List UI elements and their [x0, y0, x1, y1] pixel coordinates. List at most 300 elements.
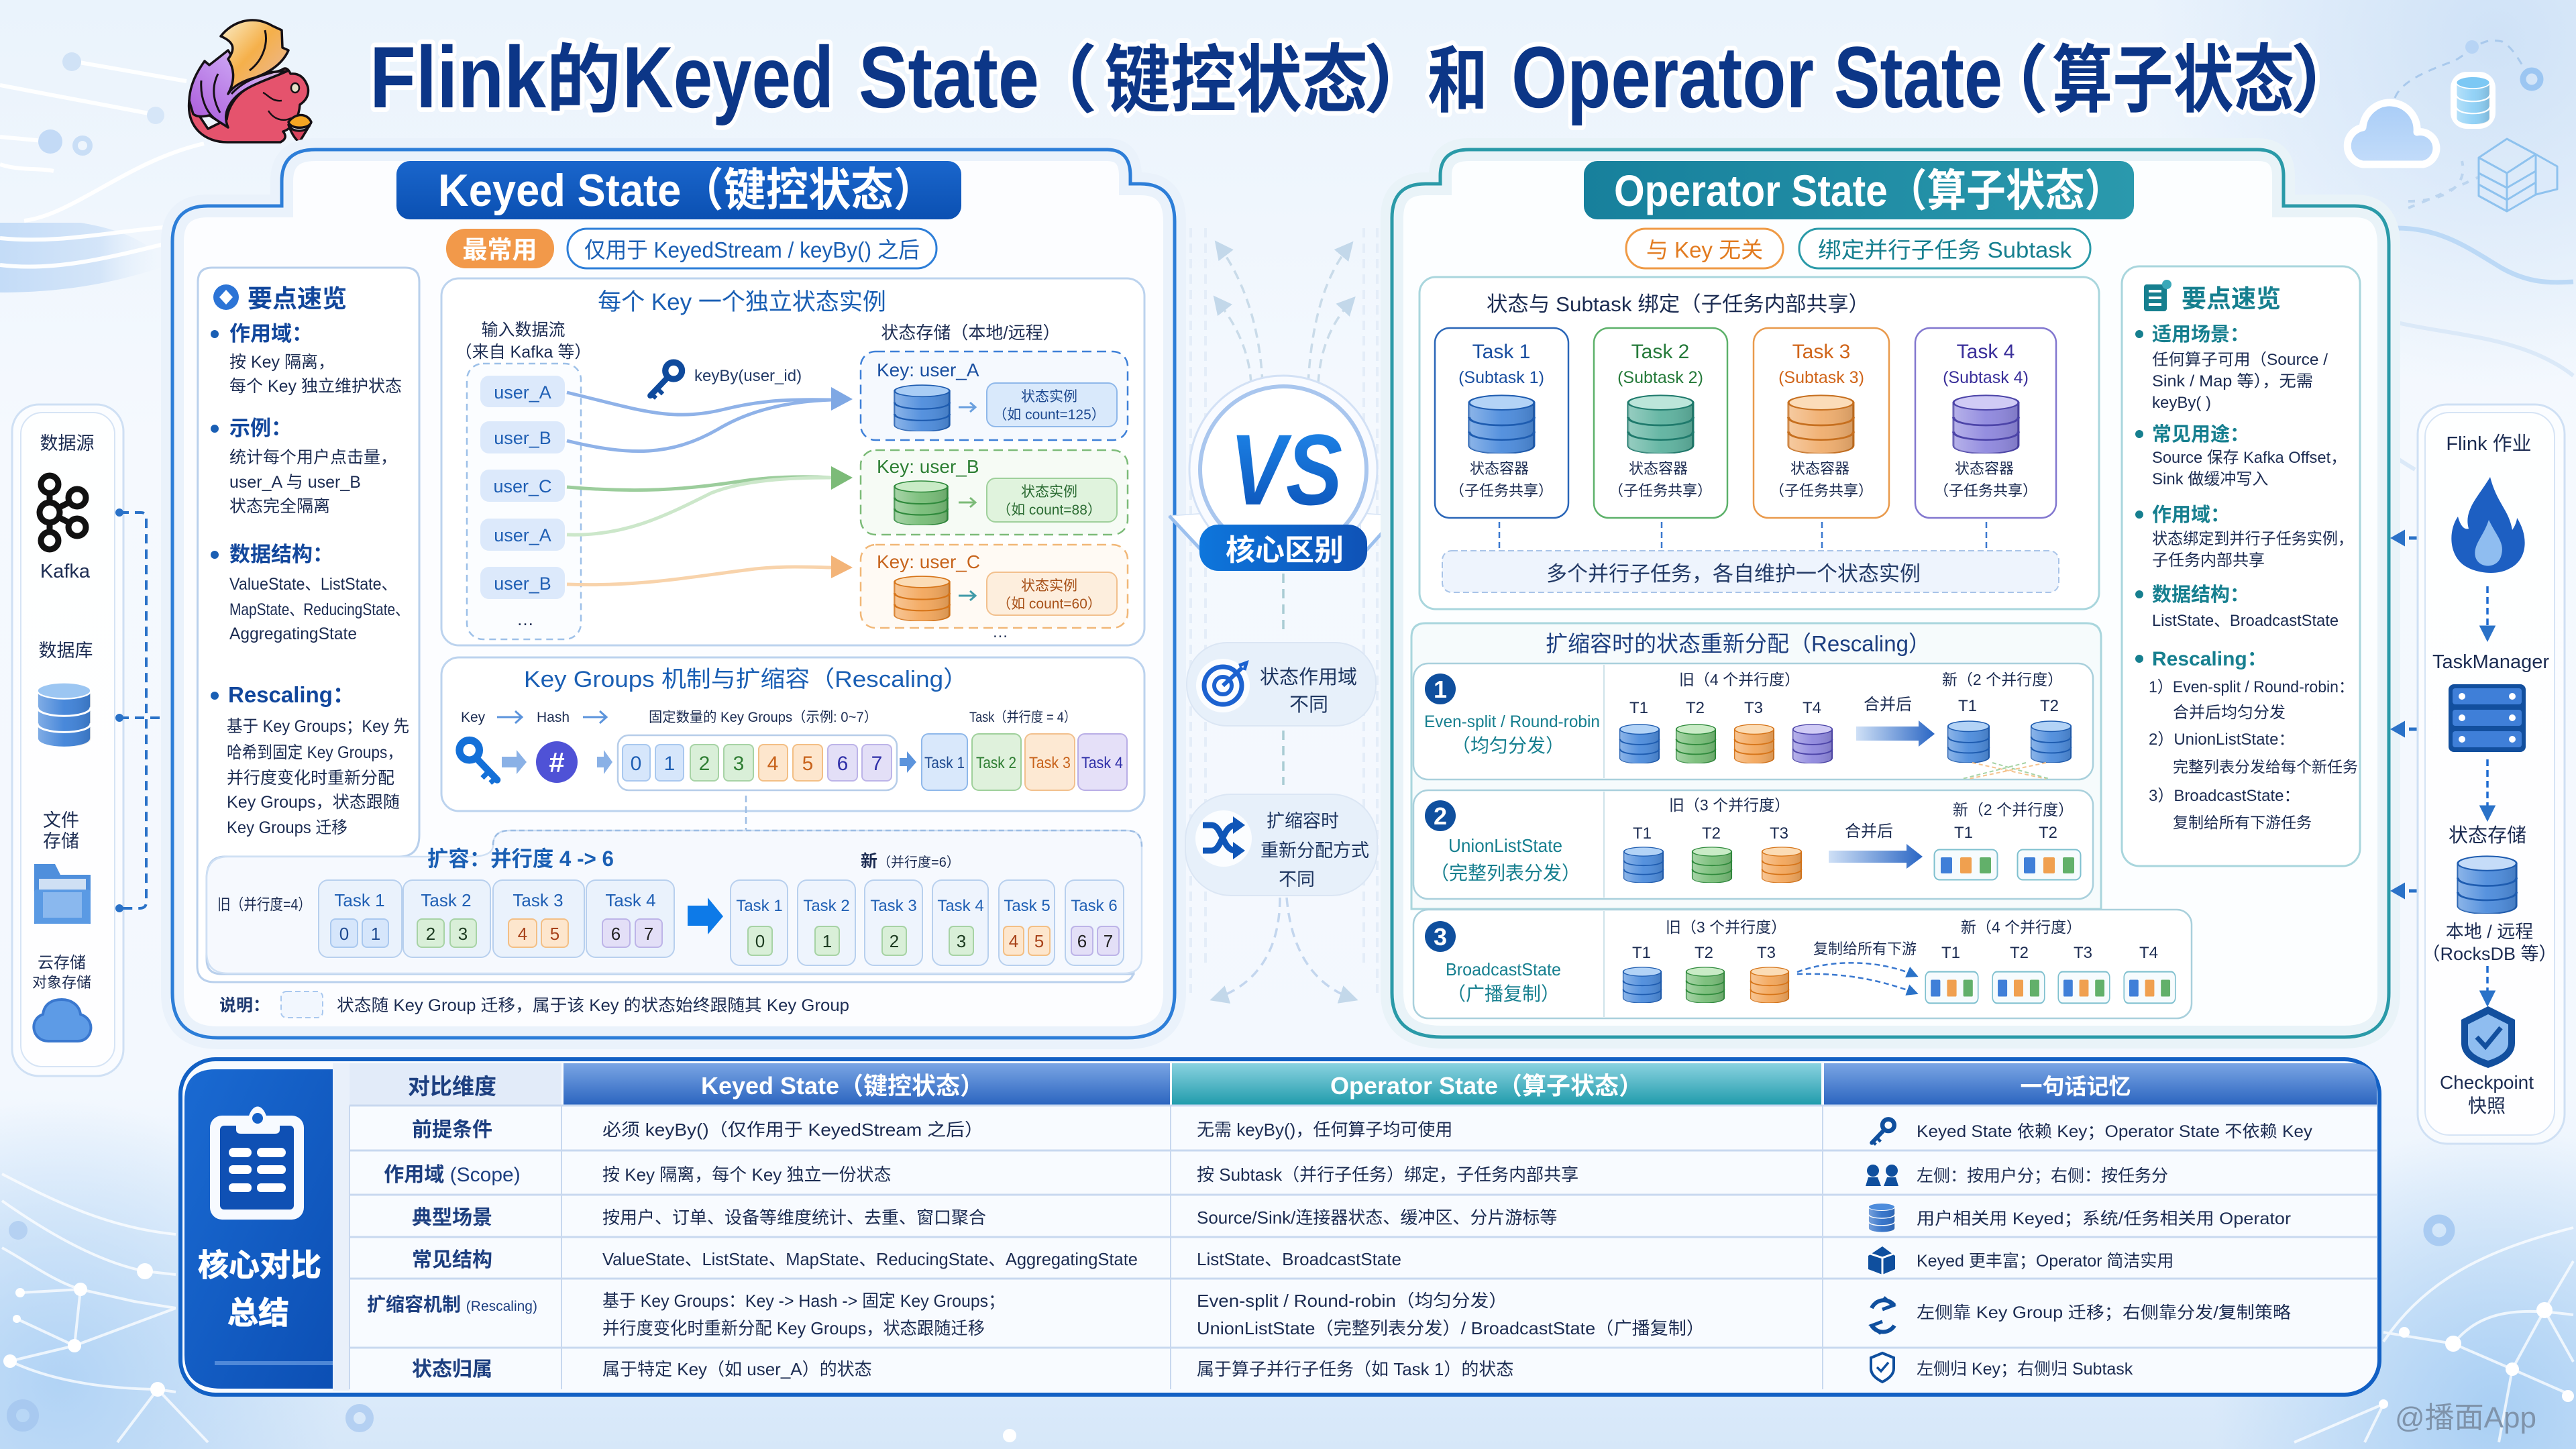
title: （ [1024, 40, 1097, 122]
text: TaskManager: TaskManager [2432, 651, 2549, 673]
row: broadcast state: T4 [2139, 944, 2158, 962]
group: new tasks: 4 [1009, 931, 1018, 951]
title: Flink [370, 28, 547, 126]
group: four tasks [922, 734, 1127, 790]
decoration: dashed curves around VS [1191, 228, 1377, 999]
group: old tasks: Task 1 [334, 890, 385, 910]
group: old tasks: Task 2 [421, 890, 472, 910]
text: common uses [2135, 423, 2347, 488]
legend: 状态随 Key Group 迁移，属于该 Key 的状态始终跟随其 Key Group [337, 996, 849, 1015]
text: data structures: AggregatingState [229, 625, 357, 643]
icon: state store [2458, 856, 2516, 914]
state: user A [861, 352, 1128, 440]
text: common uses: Sink 做缓冲写入 [2152, 470, 2268, 488]
row: broadcast state: T1 [1941, 944, 1960, 962]
row: broadcast state: 复制给所有下游 [1813, 941, 1917, 957]
group: input keys: user_B [494, 574, 551, 594]
icon: hash: # [549, 747, 565, 778]
row labels: 作用域 (Scope) [384, 1164, 521, 1186]
row: union list state: （完整列表分发） [1430, 863, 1580, 883]
block: summary label [184, 1069, 333, 1389]
group: four tasks: Task 3 [1029, 754, 1071, 772]
text: rescaling: Rescaling： [228, 682, 355, 707]
row: broadcast state: T3 [2074, 944, 2092, 962]
group: new tasks: 1 [822, 931, 832, 951]
callout: scope differs: 不同 [1289, 694, 1328, 716]
text: applicable scenarios: 适用场景： [2152, 323, 2249, 345]
icon: doc [2144, 280, 2171, 311]
group: new tasks: 5 [1034, 931, 1044, 951]
group: input keys: … [517, 609, 534, 629]
arrow: flame to TaskManager [2486, 586, 2489, 637]
group: four tasks: Task 2 [976, 754, 1016, 772]
state: user C: 状态实例 [1021, 578, 1077, 594]
badge: KeyedStream only [568, 229, 936, 268]
column: Keyed State values: 基于 Key Groups：Key -> Hash -> 固定 Key Groups； [602, 1291, 1005, 1311]
card: task 3: （子任务共享） [1770, 482, 1873, 499]
text: example: 状态完全隔离 [229, 497, 330, 516]
group: input keys: user_C [493, 476, 552, 496]
note: each subtask keeps state: 多个并行子任务，各自维护一个状态实例 [1546, 562, 1921, 586]
arrows: green flows [567, 466, 853, 535]
card: task 4: （子任务共享） [1934, 482, 2037, 499]
group: new tasks: Task 6 [1071, 897, 1118, 915]
panel: key points right [2122, 266, 2360, 866]
column: Keyed State values: 属于特定 Key（如 user_A）的状态 [602, 1359, 872, 1379]
text: applicable scenarios: 任何算子可用（Source / [2152, 351, 2328, 369]
text: example: user_A 与 user_B [229, 473, 361, 492]
row labels: 扩缩容机制 (Rescaling) [367, 1294, 537, 1315]
column: Keyed State values: 并行度变化时重新分配 Key Groups，状态跟随迁移 [602, 1318, 985, 1338]
text: data structures right: ListState、BroadcastState [2152, 612, 2339, 630]
group: new tasks: Task 4 [937, 897, 984, 915]
text: applicable scenarios: keyBy( ) [2152, 394, 2211, 412]
row: even split: T2 [1686, 699, 1705, 717]
arrows: job panel to operator panel [2395, 538, 2418, 891]
state: user A: （如 count=125） [993, 407, 1106, 423]
column: one-line memory values: Keyed State 依赖 Key；Operator State 不依赖 Key [1917, 1122, 2313, 1141]
group: key groups 0 to 7: 5 [802, 753, 813, 775]
heading: Keyed State: Keyed State（键控状态） [438, 165, 936, 216]
text: data structures right [2135, 584, 2339, 630]
title: 键控状态 [1105, 40, 1368, 122]
row: broadcast state: T2 [1695, 944, 1713, 962]
column: Operator State values: 属于算子并行子任务（如 Task 1）的状态 [1197, 1359, 1513, 1379]
card: task 4: 状态容器 [1955, 460, 2014, 477]
callout: redistribution differs: 不同 [1279, 869, 1315, 890]
row: even split: Even-split / Round-robin [1424, 712, 1600, 731]
text: rescaling right: 2）UnionListState： [2149, 731, 2294, 749]
title: 的 [546, 38, 621, 122]
text: data structures right: 数据结构： [2152, 584, 2249, 606]
state: user C: Key: user_C [877, 551, 980, 572]
text: hash flow labels: Hash [537, 710, 570, 725]
column: Operator State values [1197, 1120, 1705, 1379]
text: database: 数据库 [39, 641, 93, 661]
group: new tasks: Task 1 [736, 897, 783, 915]
group: key groups 0 to 7: 3 [733, 753, 744, 775]
title: Operator [1511, 28, 1814, 126]
panel: key groups [441, 657, 1144, 811]
title: 和 [1428, 40, 1488, 121]
group: old tasks: Task 4 [605, 890, 656, 910]
panel: Keyed State [172, 150, 1175, 1038]
group: key groups 0 to 7 [618, 735, 897, 790]
badge: key independent: 与 Key 无关 [1646, 237, 1763, 262]
badge: most used [446, 229, 554, 268]
text: rescaling right [2135, 648, 2358, 831]
row: broadcast state: 3 [1434, 923, 1447, 951]
VS badge [1169, 376, 1397, 571]
legend: 说明： [219, 996, 270, 1015]
title: Keyed [623, 28, 834, 126]
column: Keyed State values: 必须 keyBy()（仅作用于 KeyedStream 之后） [602, 1120, 983, 1140]
group: old tasks: 2 [426, 924, 435, 944]
text: input stream: 输入数据流 [481, 321, 566, 339]
badge: key independent [1626, 229, 1783, 268]
text: applicable scenarios [2135, 323, 2328, 412]
arrow: hash to groups [597, 750, 612, 774]
text: checkpoint: 快照 [2468, 1095, 2506, 1116]
badge: KeyedStream only: 仅用于 KeyedStream / keyBy() 之后 [584, 237, 920, 262]
decoration: cloud, database and cube top right [2347, 40, 2557, 211]
icon: database [38, 683, 91, 747]
table header [350, 1063, 2377, 1106]
arrows: orange flows [567, 555, 853, 585]
row labels: 典型场景 [412, 1207, 492, 1229]
group: old tasks: Task 3 [513, 890, 564, 910]
column: Operator State values: 无需 keyBy()，任何算子均可使用 [1197, 1120, 1452, 1140]
text: common uses: Source 保存 Kafka Offset， [2152, 449, 2347, 467]
badge: core difference [1199, 525, 1367, 571]
card: task 1: （子任务共享） [1450, 482, 1553, 499]
icon: cloud [34, 1000, 91, 1041]
icons: one-line memory [1866, 1119, 1898, 1382]
column: one-line memory values: 左侧：按用户分；右侧：按任务分 [1917, 1167, 2168, 1185]
arrow: groups to tasks [900, 751, 916, 773]
group: new tasks: 3 [957, 931, 966, 951]
group: key groups 0 to 7: 2 [699, 753, 710, 775]
text: data structures: MapState、ReducingState、 [229, 600, 409, 619]
row: even split: 合并后 [1864, 696, 1912, 714]
card: task 2: （子任务共享） [1609, 482, 1712, 499]
text: rescaling [211, 682, 409, 837]
row: union list state: T2 [2039, 824, 2057, 842]
text: input stream: （来自 Kafka 等） [455, 343, 591, 362]
group: old tasks [319, 880, 674, 957]
panel: key points [197, 268, 1134, 982]
arrow: data source connector [115, 508, 169, 912]
panel: Operator State [1392, 150, 2389, 1037]
column: Keyed State values: 按用户、订单、设备等维度统计、去重、窗口聚合 [602, 1208, 986, 1228]
row: even split: （均匀分发） [1452, 735, 1564, 756]
column: one-line memory values: Keyed 更丰富；Operator 简洁实用 [1917, 1252, 2174, 1271]
group: old tasks: 7 [644, 924, 653, 944]
heading: state bound: 状态与 Subtask 绑定（子任务内部共享） [1487, 292, 1870, 316]
icon: flame [2451, 477, 2525, 573]
heading: Operator State: Operator State（算子状态） [1614, 166, 2124, 215]
group: input keys: user_A [494, 525, 551, 545]
group: new tasks: Task 2 [803, 897, 850, 915]
group: new tasks: Task 3 [870, 897, 917, 915]
group: key groups 0 to 7: 6 [837, 753, 848, 775]
badge: bound to subtask: 绑定并行子任务 Subtask [1818, 237, 2072, 262]
text: data structures: 数据结构： [229, 543, 333, 566]
icon: server [2449, 684, 2526, 752]
state: user B: （如 count=88） [997, 502, 1102, 518]
column: Operator State values: UnionListState（完整列表分发）/ BroadcastState（广播复制） [1197, 1318, 1705, 1338]
row: union list state: T3 [1770, 824, 1788, 843]
text: keyBy: keyBy(user_id) [694, 367, 802, 385]
column: Operator State values: 按 Subtask（并行子任务）绑定，子任务内部共享 [1197, 1165, 1578, 1185]
text: scope right: 状态绑定到并行子任务实例， [2152, 530, 2353, 548]
callout: redistribution differs [1185, 794, 1377, 896]
text: state storage right: 状态存储 [2449, 824, 2526, 847]
text: data structures [211, 543, 409, 643]
row: union list state: T2 [1702, 824, 1721, 843]
row: even split: 新（2 个并行度） [1942, 671, 2063, 688]
arrow: server to storage [2486, 759, 2489, 817]
group: input keys: user_A [494, 382, 551, 402]
text: rescaling: 基于 Key Groups；Key 先 [227, 717, 409, 736]
text: key points heading right: 要点速览 [2182, 285, 2281, 313]
icon: big key [460, 740, 497, 783]
title: ） [2290, 40, 2364, 122]
text: scope right: 子任务内部共享 [2152, 551, 2265, 570]
state: user C [861, 545, 1128, 628]
state: user C: （如 count=60） [997, 596, 1102, 612]
row: even split [1413, 663, 2093, 780]
heading: rescaling: 扩缩容时的状态重新分配（Rescaling） [1546, 631, 1931, 656]
row: broadcast state: 旧（3 个并行度） [1666, 918, 1786, 936]
group: new tasks: 6 [1077, 931, 1087, 951]
text: common uses: 常见用途： [2152, 423, 2249, 445]
row: union list state: UnionListState [1448, 835, 1562, 856]
table header: 对比维度 [408, 1074, 496, 1099]
icon: shield [2461, 1006, 2515, 1068]
group: new tasks: 7 [1104, 931, 1113, 951]
column: Keyed State values [602, 1120, 1138, 1379]
state: user B [861, 450, 1128, 535]
panel: scale out 4 to 6 [207, 830, 1142, 973]
badge: most used: 最常用 [463, 236, 537, 264]
column: one-line memory values: 左侧归 Key；右侧归 Subtask [1917, 1360, 2133, 1379]
title: 算子状态 [2052, 40, 2294, 122]
text: scope right: 作用域： [2152, 504, 2230, 526]
heading: one state per key: 每个 Key 一个独立状态实例 [598, 289, 886, 315]
badge: bound to subtask [1799, 229, 2090, 268]
table grid [350, 1106, 2377, 1389]
text: scope [211, 322, 402, 396]
card: task 2 [1594, 328, 1727, 518]
callout: scope differs: 状态作用域 [1260, 667, 1357, 688]
row: broadcast state [1413, 910, 2192, 1018]
connector: key groups to expansion [745, 796, 747, 830]
arrow: key to hash [502, 750, 527, 774]
state: user B: 状态实例 [1021, 484, 1077, 500]
icon: hash [536, 741, 578, 783]
column: Keyed State values: 按 Key 隔离，每个 Key 独立一份状态 [602, 1165, 891, 1185]
text: rescaling: 哈希到固定 Key Groups， [227, 743, 402, 762]
text: scope: 每个 Key 独立维护状态 [229, 377, 402, 396]
icon: shuffle [1203, 816, 1245, 859]
row: union list state: 2 [1434, 802, 1447, 830]
text: rescaling right: 完整列表分发给每个新任务 [2173, 758, 2358, 775]
text: data source heading: 数据源 [40, 433, 94, 453]
text: scope: 作用域： [229, 322, 313, 345]
column: Keyed State values: ValueState、ListState、MapState、ReducingState、AggregatingState [602, 1249, 1138, 1269]
text: rescaling right: 复制给所有下游任务 [2173, 814, 2312, 831]
text: hash flow labels [461, 710, 1076, 725]
callout: redistribution differs: 重新分配方式 [1260, 841, 1369, 861]
row labels: 常见结构 [412, 1249, 492, 1271]
group: old tasks: 4 [518, 924, 527, 944]
table header: Keyed State（键控状态） [701, 1072, 984, 1099]
row: even split: 1 [1434, 676, 1447, 703]
table header: Operator State（算子状态） [1330, 1072, 1643, 1099]
row: union list state: 新（2 个并行度） [1953, 801, 2074, 818]
group: new tasks: 2 [890, 931, 899, 951]
table header: 一句话记忆 [2021, 1074, 2131, 1099]
card: task 1: Task 1 [1472, 341, 1530, 363]
card: task 3 [1754, 328, 1889, 518]
column: one-line memory values: 左侧靠 Key Group 迁移；右侧靠分发/复制策略 [1917, 1303, 2291, 1322]
group: four tasks: Task 1 [924, 754, 965, 772]
row: broadcast state: BroadcastState [1446, 959, 1561, 979]
group: new tasks: 0 [755, 931, 765, 951]
card: task 1 [1435, 328, 1568, 518]
heading: scale out: 扩容：并行度 4 -> 6 [427, 847, 614, 871]
group: old tasks: 0 [339, 924, 349, 944]
row: union list state: T1 [1633, 824, 1652, 843]
text: rescaling right: Rescaling： [2152, 648, 2267, 670]
text: data structures: ValueState、ListState、 [229, 575, 397, 594]
panel: one state per key [441, 278, 1144, 645]
panel: one state per key: … [992, 623, 1008, 641]
card: task 2: 状态容器 [1629, 460, 1688, 477]
group: old tasks: 6 [611, 924, 621, 944]
text: local or remote: （RocksDB 等） [2422, 944, 2557, 964]
group: key groups 0 to 7: 0 [631, 753, 641, 775]
row: union list state: T1 [1954, 824, 1973, 842]
card: task 2: (Subtask 2) [1617, 368, 1703, 387]
row: even split: T4 [1803, 699, 1821, 717]
text: rescaling: Key Groups 迁移 [227, 818, 347, 837]
title: ） [1363, 40, 1437, 122]
title: State [1834, 28, 2002, 126]
row labels [367, 1119, 537, 1381]
text: file storage: 文件 [43, 810, 79, 830]
column: Operator State values: Even-split / Round-robin（均匀分发） [1197, 1291, 1507, 1311]
row: union list state [1413, 790, 2093, 899]
badge: core difference: 核心区别 [1226, 534, 1344, 567]
group: new tasks [731, 880, 1124, 965]
row: broadcast state: 新（4 个并行度） [1961, 918, 2082, 936]
arrow: old to new [688, 898, 723, 934]
row: even split: T1 [1629, 699, 1648, 717]
row: broadcast state: （广播复制） [1447, 983, 1560, 1004]
row: even split: T1 [1958, 697, 1977, 715]
text: old parallelism: 旧（并行度=4） [217, 896, 311, 913]
panel: data sources [12, 405, 123, 1076]
icon: target [1204, 663, 1246, 704]
text: Flink job: Flink 作业 [2446, 433, 2532, 455]
text: checkpoint: Checkpoint [2440, 1072, 2534, 1093]
card: task 3: Task 3 [1792, 341, 1850, 363]
row: even split: T2 [2040, 697, 2059, 715]
text: example [211, 417, 397, 516]
text: applicable scenarios: Sink / Map 等），无需 [2152, 372, 2313, 390]
card: task 2: Task 2 [1631, 341, 1689, 363]
legend [219, 991, 849, 1018]
column: Operator State values: Source/Sink/连接器状态、缓冲区、分片游标等 [1197, 1208, 1557, 1228]
row: union list state: 旧（3 个并行度） [1669, 796, 1790, 814]
callout: scope differs [1187, 643, 1376, 726]
card: task 1: 状态容器 [1470, 460, 1529, 477]
text: rescaling right: 1）Even-split / Round-robin： [2149, 678, 2354, 696]
callout: redistribution differs: 扩缩容时 [1267, 811, 1339, 831]
column: one-line memory values [1917, 1122, 2313, 1379]
row: broadcast state: T1 [1632, 944, 1651, 962]
panel: Flink job [2418, 405, 2565, 1144]
group: new tasks: Task 5 [1004, 897, 1051, 915]
group: old tasks: 5 [550, 924, 559, 944]
icon: key points [213, 284, 239, 310]
VS badge: VS [1230, 413, 1342, 526]
icon: clipboard [210, 1107, 304, 1220]
panel: comparison table [180, 1059, 2379, 1395]
note: each subtask keeps state [1442, 551, 2059, 592]
text: example: 统计每个用户点击量， [229, 448, 397, 467]
text: scope right [2135, 504, 2353, 570]
text: hash flow labels: 固定数量的 Key Groups（示例: 0~7） [649, 710, 877, 725]
text: example: 示例： [229, 417, 292, 440]
row: broadcast state: T3 [1757, 944, 1776, 962]
card: task 1: (Subtask 1) [1458, 368, 1544, 387]
group: four tasks: Task 4 [1081, 754, 1123, 772]
watermark: @播面App [2395, 1401, 2536, 1434]
text: rescaling: Key Groups，状态跟随 [227, 793, 400, 812]
row: broadcast state: T2 [2010, 944, 2029, 962]
text: cloud storage: 云存储 [38, 954, 86, 972]
text: core comparison summary: 核心对比 [198, 1248, 321, 1283]
card: task 3: 状态容器 [1790, 460, 1849, 477]
group: input keys [467, 364, 581, 639]
text: local or remote: 本地 / 远程 [2446, 922, 2533, 942]
text: rescaling: 并行度变化时重新分配 [227, 769, 394, 788]
arrows: blue flows [567, 387, 853, 451]
text: hash flow labels: Key [461, 710, 486, 725]
text: key points heading: 要点速览 [248, 285, 347, 313]
text: Kafka: Kafka [40, 561, 91, 582]
icon: key [650, 362, 682, 398]
column: one-line memory values: 用户相关用 Keyed；系统/任务相关用 Operator [1917, 1210, 2291, 1228]
text: file storage: 存储 [43, 831, 79, 851]
text: rescaling right: 合并后均匀分发 [2173, 704, 2286, 722]
icon: Flink squirrel logo [189, 20, 311, 142]
card: task 4: (Subtask 4) [1943, 368, 2029, 387]
group: old tasks: 1 [371, 924, 380, 944]
text: core comparison summary: 总结 [227, 1295, 289, 1330]
title: （ [1975, 40, 2049, 122]
row: even split: 旧（4 个并行度） [1679, 671, 1800, 688]
connectors: tasks to note [1499, 522, 1986, 550]
row labels: 状态归属 [412, 1358, 492, 1381]
row: even split: T3 [1744, 699, 1763, 717]
row labels: 前提条件 [412, 1119, 492, 1141]
row: union list state: 合并后 [1845, 822, 1893, 841]
group: key groups 0 to 7: 7 [871, 753, 882, 775]
